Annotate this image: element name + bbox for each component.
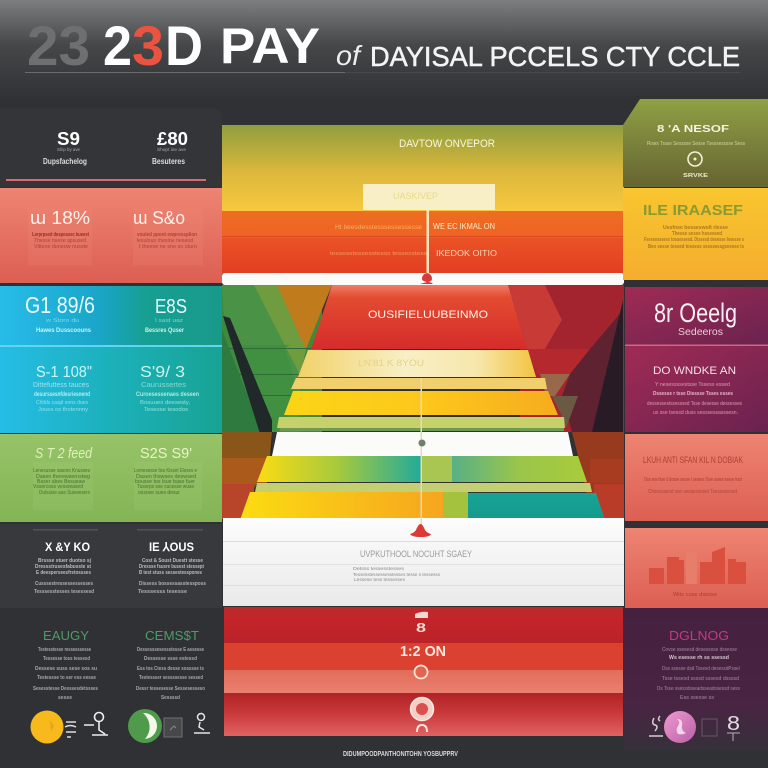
panel: left dark text columns: Brssse stuer duotso sj (38, 558, 91, 564)
panel: left dark text columns: X &Y KO (45, 540, 90, 554)
panel: left green stats: Vssercoss vessreased (33, 484, 83, 490)
panel: right olive card (623, 99, 768, 187)
panel: right olive card: SRVKE (683, 173, 708, 179)
panel: top center gradient: UASKIVEP (393, 191, 438, 201)
panel: left blue stats top: Bessres Quser (145, 327, 184, 334)
panel: right purple text: us sse tsessd duss sesssessasssesn. (653, 410, 738, 416)
panel: right yellow card: Ussfnse besseswolt rlesse (663, 225, 728, 231)
title (27, 14, 740, 77)
panel: right purple text: DO WNDKE AN (653, 365, 736, 377)
panel: left blue stats top: G1 89/6 (25, 292, 95, 318)
panel: right yellow card: Beo sesse tossed tossess sesssessgsessse ts (648, 244, 744, 250)
panel: bottom left column CEMSBT: Sessssd (161, 695, 180, 701)
panel: left green stats: Lornesesse tiss Kisset Eleses e (134, 468, 197, 474)
panel: left green stats: ossose sues desur (138, 490, 180, 496)
panel: right yellow card (623, 188, 768, 280)
icon: person figure left (84, 712, 108, 735)
panel: right olive card: Rises Trase Sesssse Sesse Tsessesssse Sess (647, 141, 745, 147)
panel: right purple text (625, 346, 768, 432)
panel: left dark text columns (0, 524, 222, 608)
panel: left dark stats (0, 108, 222, 187)
panel: left dark text columns: Cusssestressessessesses (35, 581, 93, 587)
panel: left dark stats: S9 (57, 129, 80, 149)
panel: white text card: UVPKUTHOOL NOCUHT SGAEY (360, 549, 472, 559)
panel: left blue stats bottom: S'9/ 3 (140, 364, 185, 381)
panel: orange center band: Ht beesdesstesssessessesse (335, 225, 423, 231)
panel: orange center band: IKEDOK OITIO (436, 248, 497, 258)
panel: left blue stats bottom (0, 347, 222, 433)
panel: bottom left column CEMSBT: Testessser sessssesse sessed (139, 675, 203, 681)
pyramid tier: narrow gold (291, 378, 547, 389)
pyramid tier: red (311, 285, 527, 349)
panel: bottom left column EAUGY: EAUGY (43, 628, 89, 643)
panel: bottom left column CEMSBT: Ess tos Ctess desse sosssse ts (137, 666, 204, 672)
panel: left blue stats bottom: Dittefuttess tauces (33, 382, 89, 389)
panel: right dark purple column: Ws esesse rh ss ssessd (669, 655, 729, 661)
panel: right city skyline (625, 528, 768, 608)
panel: left dark text columns: IE ⅄OUS (149, 540, 194, 554)
icon: green moon (128, 709, 162, 743)
panel: white text card: Detsss tessesstesses (353, 566, 405, 571)
panel: left salmon stats: Thesse nuese apsused (34, 238, 86, 244)
panel: left blue stats bottom: Bosuues deesesty, (140, 400, 190, 406)
panel: right purple text: dessessestssesssed Tsse desesse dessesses (647, 401, 742, 407)
panel: orange center band: tessesstessesstesss tessesstess (330, 251, 428, 257)
footer caption: DIDUMPOODPANTHONITOHN YOSBUPPRV (343, 751, 458, 758)
pyramid tier: red: OUSIFIELUUBEINMO (368, 309, 488, 321)
panel: red stacked bands: 8 (416, 620, 426, 635)
panel: left green stats: Dasen therewsernstwg (36, 474, 90, 480)
icon: S figure: 8 (727, 713, 740, 735)
panel: right salmon text (625, 434, 768, 521)
panel: right dark purple column: Dss ssesse dsd Tssesd desessdPsse/ (662, 666, 740, 672)
icon: S figure (727, 713, 740, 741)
title: DAYISAL PCCELS CTY CCLE (370, 41, 740, 72)
panel: right yellow card: Thesse sesse hsseseed (672, 231, 722, 237)
panel: left green stats: Baser ubes Besueaw (37, 479, 85, 485)
pyramid tier: cream (298, 350, 536, 377)
pyramid tier: white (272, 432, 573, 456)
panel: right salmon text: Chsesssesd sse sessesseset Tsessesssed (648, 489, 737, 495)
pyramid tier: green gradient (257, 456, 587, 482)
panel: right dark purple column: Ess ssesse ss (680, 695, 714, 701)
panel: left blue stats top: w Storo du (45, 318, 79, 324)
panel: left blue stats bottom: Caurussertes (141, 382, 187, 389)
panel: left blue stats top: Hawes Dusscoouns (36, 327, 91, 334)
pyramid tier: cream: LN'81 K 8YOU (358, 358, 424, 369)
panel: bottom left column EAUGY: Testessse to ser ess eesse (37, 675, 96, 681)
pyramid tier: multicolor base (240, 492, 605, 520)
panel: bottom left column EAUGY: Sesesstesse Desssesdetssses (33, 686, 98, 692)
panel: left salmon stats: I thesse ne sne so sturn (139, 244, 197, 250)
icon: figure on pedestal (649, 716, 663, 736)
panel: left blue stats bottom: Chtlds caspl eons dues (36, 400, 88, 406)
title: D (165, 14, 203, 77)
panel: bottom left column CEMSBT: Dessesse ssse estessd (144, 656, 197, 662)
leader line top (426, 210, 429, 276)
panel: right city skyline: Wite cuse dsesse (673, 592, 717, 598)
panel: left salmon stats (0, 188, 222, 283)
panel: bottom left column CEMSBT: CEMS$T (145, 628, 199, 643)
panel: left dark stats: £80 (157, 129, 188, 149)
panel: right purple text: Dssesse r tsse Disssse Tsses esses (653, 391, 733, 397)
panel: bottom left column CEMSBT: Dessr tessesesse Sessesesseso (136, 686, 206, 692)
panel: right dark purple column: DGLNOG (669, 628, 729, 643)
panel: white text card (223, 518, 624, 606)
panel: left green stats: S2S S9' (140, 445, 192, 462)
background facets: left (222, 285, 332, 519)
panel: bottom left column CEMSBT (136, 628, 206, 701)
panel: left green stats: Dasen thswses deswsed (136, 474, 196, 480)
icon: red pin top (420, 273, 433, 284)
panel: left dark stats: Besuteres (152, 157, 185, 166)
panel: left green stats (0, 434, 222, 522)
panel: left dark text columns: Tesssesstesses tesessesd (34, 589, 94, 595)
panel: left blue stats top: E8S (155, 296, 187, 318)
title: of (336, 40, 363, 71)
panel: orange center band: WE EC IKMAL ON (433, 221, 495, 231)
panel: red stacked bands (224, 607, 623, 736)
panel: left blue stats bottom: S-1 108" (36, 364, 92, 381)
panel: left blue stats bottom: desurssesnfdesriesnend (34, 392, 90, 398)
icon: outline box (702, 719, 717, 736)
center vertical connector (418, 378, 426, 525)
panel: left blue stats bottom: Joues os thotennny (38, 407, 88, 413)
panel: left blue stats top: I sast uaz (155, 318, 183, 324)
panel: left dark text columns: Dissess bossessasstessposs (139, 581, 206, 587)
panel: right yellow card: ILE IRAASEF (643, 202, 743, 219)
panel: right purple heading: 8r Oeelg (654, 298, 737, 328)
panel: right purple heading (625, 287, 768, 345)
icon: screen (164, 718, 182, 737)
panel: left dark text columns: Tesssesss tesesse (138, 589, 187, 595)
icon: small stack (65, 722, 76, 737)
panel: red stacked bands: 1:2 ON (400, 643, 446, 660)
title: 23 (27, 14, 90, 77)
panel: top center gradient (222, 125, 624, 211)
panel: right dark purple column: Tsse tssesd ssssd sssesd dssssd (662, 676, 739, 682)
panel: right dark purple column: Covse ssesesd desessose dssesse (662, 647, 737, 653)
panel: left dark text columns: Cost & Soust Duestt stesse (142, 558, 203, 564)
panel: right purple heading: Sedeeros (678, 327, 723, 338)
panel: left green stats: Lenesusse sasors Knusses (33, 468, 90, 474)
panel: left salmon stats: vouled ppont ewpressplion (137, 232, 197, 238)
panel: orange center band (222, 211, 624, 274)
panel: left salmon stats: lesulous rhesine neseod (137, 238, 193, 244)
header band (0, 0, 768, 100)
panel: right olive card: 8 'A NESOF (657, 123, 730, 135)
background facets: right (508, 285, 624, 518)
panel: bottom left column EAUGY: sesse (58, 695, 72, 701)
panel: left green stats: S T 2 feed (35, 445, 93, 462)
panel: bottom left column EAUGY (33, 628, 98, 701)
panel: top center gradient: DAVTOW ONVEPOR (399, 138, 495, 150)
icon: yellow sun (30, 710, 64, 744)
panel: bottom left column EAUGY: Testesstesse ressesssesse (38, 647, 91, 653)
icon: red pin lower (410, 524, 431, 537)
panel: left dark stats: Shopt ine ave (157, 147, 187, 152)
panel: white text card: Lessese tess tessesses (354, 577, 406, 582)
pyramid tier: light green (277, 417, 565, 428)
title: PAY (220, 18, 320, 74)
pyramid tier: yellow (284, 391, 558, 415)
panel: right dark purple column: Ds Tsse ssessdsseadsseadssessd sess (657, 686, 740, 692)
panel: left green stats: Dutssise aue Suswesers (39, 490, 90, 496)
panel: left dark text columns: B test stuss sessestesspones (139, 570, 202, 576)
panel: bottom left column EAUGY: Dessese suss sese sos su (35, 666, 97, 672)
white shelf bar (222, 273, 624, 285)
panel: left dark text columns: E deesperseesfrstossses (36, 570, 91, 576)
panel: left blue stats top (0, 286, 222, 345)
title: 3 (132, 14, 164, 77)
panel: right purple text: Y nesessssestsse Tssess essed (655, 382, 730, 388)
panel: left blue stats bottom: Curoesessenaes deseen (136, 392, 199, 398)
panel: left green stats: bousse tos lsue base fuer (135, 479, 195, 485)
panel: left salmon stats: Lorprpsed despossec kusest (32, 232, 89, 238)
panel: left dark stats: Dupsfachelog (43, 157, 87, 166)
panel: left green stats: Tusorps soe sucesse wuse (137, 484, 194, 490)
panel: left salmon stats: Vitteve deneow nusste (34, 244, 88, 250)
panel: bottom left column EAUGY: Tessesse toss tessesd (43, 656, 90, 662)
panel: left blue stats bottom: Teseose tesodos (144, 407, 188, 413)
panel: left salmon stats: ɯ 18% (30, 208, 90, 228)
pyramid tier: light green lower (255, 483, 592, 492)
panel: white text card: Tessesstessessesstesses tesse s tessesss (353, 572, 441, 577)
panel: bottom left column CEMSBT: Dessesssesessstesse E assesse (137, 647, 204, 653)
panel: left salmon stats: ɯ S&o (133, 208, 185, 228)
panel: left dark text columns: Dressse fsusre busest stessept (139, 564, 204, 570)
panel: left dark text columns: Dressstrusesfabusste st (35, 564, 91, 570)
icon: pink circle (664, 711, 696, 743)
panel: right dark purple column (624, 608, 768, 750)
title: 2 (103, 14, 132, 77)
panel: left dark stats: Ship by ave (57, 147, 80, 152)
icon: person figure right (194, 714, 210, 733)
